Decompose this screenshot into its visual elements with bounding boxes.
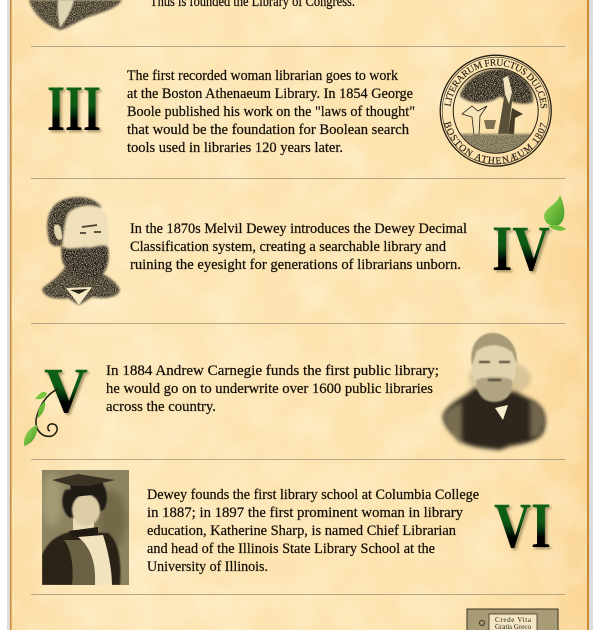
portrait: Melvil Dewey <box>42 197 120 305</box>
text: section III: The first recorded woman librarian goes to work <box>127 68 399 84</box>
text: section III <box>127 68 415 156</box>
text: section IV: ruining the eyesight for generations of librarians unborn. <box>130 257 461 273</box>
icon: Boston Athenaeum seal: BOSTON ATHENÆUM 1807 <box>444 121 546 164</box>
portrait photo: Katherine Sharp <box>42 470 129 585</box>
text: section V: across the country. <box>106 399 216 415</box>
text: section V: he would go on to underwrite over 1600 public libraries <box>106 381 433 397</box>
text: section III: Boole published his work on the "laws of thought" <box>127 104 415 120</box>
icon: Boston Athenaeum seal <box>440 54 552 167</box>
text: section V: In 1884 Andrew Carnegie funds the first public library; <box>106 363 439 379</box>
text: section VI: and head of the Illinois State Library School at the <box>147 541 435 557</box>
text: section VI: education, Katherine Sharp, is named Chief Librarian <box>147 523 457 539</box>
text: section III: tools used in libraries 120 years later. <box>127 140 343 156</box>
text: section VI: in 1887; in 1897 the first prominent woman in library <box>147 505 464 521</box>
text: section VI: University of Illinois. <box>147 559 268 575</box>
text: section VI <box>147 487 479 575</box>
numeral VI: VI <box>494 490 551 562</box>
text: section IV: Classification system, creating a searchable library and <box>130 239 447 255</box>
text: section IV: In the 1870s Melvil Dewey introduces the Dewey Decimal <box>130 221 467 237</box>
illustration: manuscript scroll plaque: Crede Vita <box>495 616 532 624</box>
numeral III: III <box>47 73 101 145</box>
text: section III: at the Boston Athenaeum Library. In 1854 George <box>127 86 413 102</box>
numeral V with vine <box>24 355 88 446</box>
illustration: manuscript scroll plaque <box>467 609 558 630</box>
text: section IV <box>130 221 467 273</box>
text: section VI: Dewey founds the first library school at Columbia College <box>147 487 479 503</box>
portrait: Andrew Carnegie <box>443 333 545 450</box>
numeral V with vine: V <box>44 355 88 427</box>
text: section V <box>106 363 439 415</box>
divider lines <box>31 46 565 594</box>
text: section III: that would be the foundation for Boolean search <box>127 122 410 138</box>
portrait: engraved figure cropped at top <box>29 0 122 30</box>
numeral IV with leaf: IV <box>492 213 550 285</box>
icon: Boston Athenaeum seal: LITERARUM FRUCTUS DULCES <box>444 59 548 108</box>
